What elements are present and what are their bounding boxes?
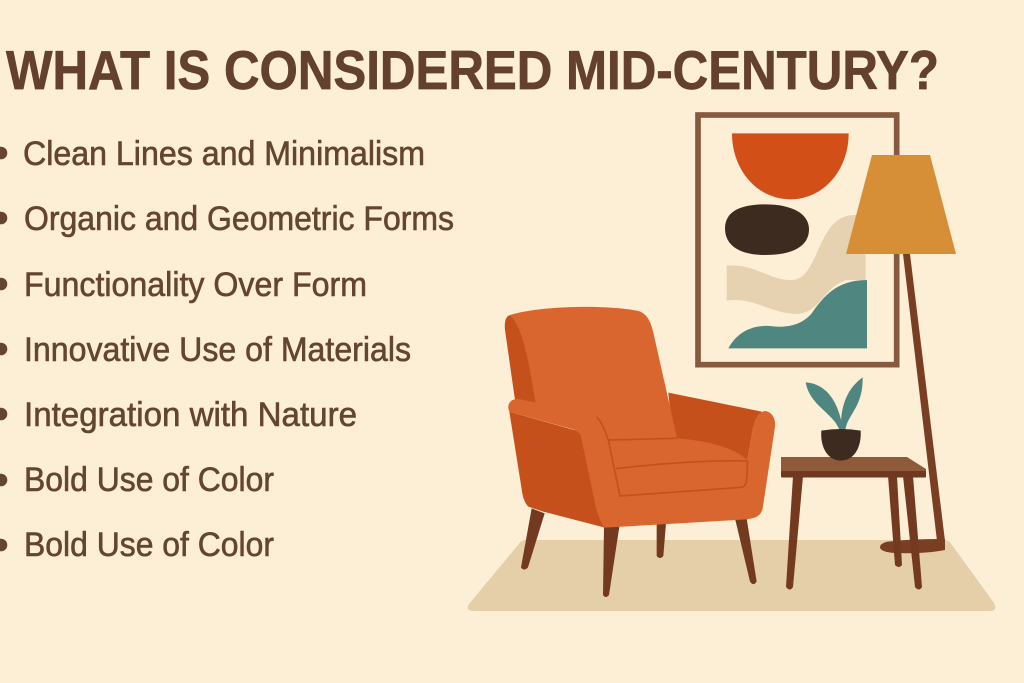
- picture frame: [698, 115, 897, 365]
- framed abstract art: [698, 115, 897, 365]
- table top: [781, 457, 926, 472]
- floor lamp: [846, 155, 956, 553]
- list item: nature: Integration with Nature: [24, 396, 357, 434]
- list item: materials: Innovative Use of Materials: [24, 331, 411, 369]
- seat cushion seams: [597, 417, 747, 496]
- table edge: [781, 471, 926, 478]
- potted plant: [806, 377, 863, 461]
- list item: functionality: Functionality Over Form: [24, 266, 367, 304]
- lamp pole: [903, 254, 945, 541]
- chair shadow side of back: [505, 315, 540, 407]
- rug: [468, 540, 995, 611]
- right leaf: [841, 377, 863, 432]
- chair legs: [521, 508, 757, 597]
- title: WHAT IS CONSIDERED MID-CENTURY?: [6, 39, 939, 101]
- list item: clean lines: Clean Lines and Minimalism: [23, 135, 425, 173]
- list item: color: Bold Use of Color: [24, 461, 274, 499]
- left leaf: [806, 382, 843, 432]
- pot: [821, 429, 861, 461]
- list item: color repeated: Bold Use of Color: [24, 526, 274, 564]
- beige wave: [727, 215, 866, 314]
- armchair: [505, 307, 775, 597]
- chair outer panel: [509, 412, 605, 528]
- list item: organic forms: Organic and Geometric Forms: [24, 200, 454, 238]
- orange half circle: [732, 133, 849, 199]
- lamp shade: [846, 155, 956, 254]
- chair arms and seat: [508, 399, 775, 528]
- dark oval: [725, 204, 809, 255]
- lamp base: [880, 539, 945, 553]
- chair inner side: [668, 393, 762, 460]
- side table: [781, 457, 926, 590]
- teal wave: [728, 280, 867, 348]
- chair back cushion: [510, 307, 677, 443]
- table legs: [786, 476, 922, 590]
- bullet list: [0, 135, 454, 564]
